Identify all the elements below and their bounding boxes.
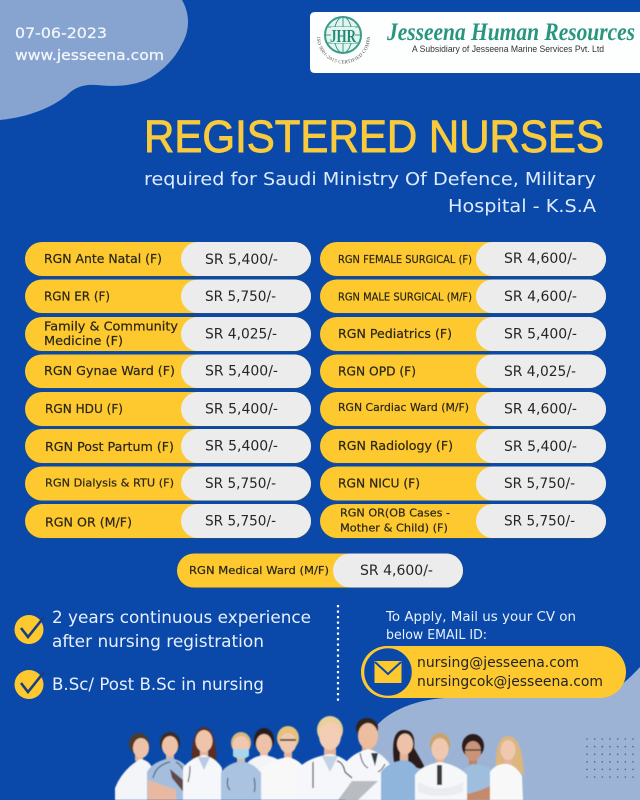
pill: RGN Dialysis and RTU: SR 5,750/- (205, 476, 276, 492)
pill: RGN Medical Ward: SR 4,600/- (360, 563, 433, 579)
subtitle (144, 169, 597, 217)
pill: RGN Dialysis and RTU (25, 466, 311, 502)
pill: RGN Pediatrics: SR 5,400/- (504, 326, 577, 342)
pill: RGN Pediatrics: RGN Pediatrics (F) (338, 327, 452, 341)
pill: RGN Dialysis and RTU: RGN Dialysis & RTU (F) (45, 478, 174, 490)
date and website (15, 26, 164, 64)
pill: RGN Medical Ward (177, 554, 463, 588)
pill: RGN HDU: SR 5,400/- (205, 402, 278, 418)
pill: RGN Cardiac Ward: SR 4,600/- (504, 402, 577, 418)
nurse 4 (221, 732, 261, 800)
nurse 7 (297, 716, 378, 800)
email callout: nursing@jesseena.com (417, 655, 579, 671)
icon: globe logo: JHR (330, 26, 357, 46)
pill: RGN Gynae Ward (25, 354, 311, 389)
pill: RGN OR (25, 504, 311, 539)
pill: RGN OR OB Cases (320, 504, 606, 539)
pill: RGN OR OB Cases: Mother & Child) (F) (340, 523, 448, 535)
pill: RGN Medical Ward: RGN Medical Ward (M/F) (189, 565, 329, 577)
pill: RGN Gynae Ward: SR 5,400/- (205, 364, 278, 380)
subtitle: required for Saudi Ministry Of Defence, Military (144, 169, 596, 190)
pill: Family and Community Medicine: SR 4,025/- (205, 326, 277, 342)
pill: Family and Community Medicine: Family & Community (44, 320, 178, 334)
dot grid (586, 738, 634, 778)
pill: Family and Community Medicine: Medicine (F) (44, 334, 123, 348)
nurse 8 (346, 718, 391, 800)
pill: RGN NICU: RGN NICU (F) (338, 477, 420, 491)
pill: RGN Post Partum: SR 5,400/- (205, 438, 278, 454)
pill: RGN Female Surgical (320, 242, 606, 277)
icon: envelope (364, 648, 412, 696)
nurse 12 (490, 736, 524, 800)
bottom-right blob (345, 667, 640, 800)
requirement: degree: B.Sc/ Post B.Sc in nursing (52, 675, 264, 694)
company logo card (310, 12, 640, 73)
pill: RGN Ante Natal: RGN Ante Natal (F) (44, 252, 162, 266)
pill: RGN ER: RGN ER (F) (44, 290, 110, 304)
pill: RGN OR: RGN OR (M/F) (45, 516, 132, 530)
pill: Family and Community Medicine (25, 317, 311, 352)
email callout: nursingcok@jesseena.com (417, 674, 603, 690)
date and website: www.jesseena.com (15, 48, 164, 64)
pill: RGN Radiology: SR 5,400/- (504, 439, 577, 455)
pill: RGN Male Surgical: RGN MALE SURGICAL (M/F) (338, 292, 472, 304)
nurse 9 (381, 730, 426, 800)
pill: RGN Cardiac Ward: RGN Cardiac Ward (M/F) (338, 402, 469, 414)
icon: globe logo (325, 17, 361, 53)
nurse 2 (147, 732, 200, 800)
pill: RGN ER: SR 5,750/- (205, 289, 276, 305)
apply instructions: below EMAIL ID: (386, 628, 487, 643)
email callout (361, 646, 626, 698)
pill: RGN OPD (320, 354, 606, 389)
nurse 11 (461, 734, 499, 800)
pill: RGN HDU (25, 392, 311, 427)
pill: RGN OPD: RGN OPD (F) (338, 365, 416, 379)
requirement: experience (52, 608, 311, 651)
nurse 3 (183, 727, 222, 800)
pill: RGN NICU: SR 5,750/- (504, 476, 575, 492)
company subtitle: A Subsidiary of Jesseena Marine Services Pvt. Ltd (412, 44, 604, 54)
pill: RGN Ante Natal: SR 5,400/- (205, 252, 278, 268)
pill: RGN Ante Natal (25, 242, 311, 277)
requirement: experience: 2 years continuous experience (52, 608, 311, 627)
pill: RGN Post Partum: RGN Post Partum (F) (45, 440, 174, 454)
pill: RGN Radiology (320, 429, 606, 464)
pill: RGN Cardiac Ward (320, 392, 606, 427)
top-left blob (0, 0, 188, 120)
pill: RGN Pediatrics (320, 317, 606, 352)
nurse 10 (415, 733, 467, 800)
pill: RGN Female Surgical: RGN FEMALE SURGICAL (F) (338, 254, 472, 266)
date and website: 07-06-2023 (15, 26, 107, 42)
pill: RGN Post Partum (25, 429, 311, 464)
nurse 6 (262, 726, 304, 800)
pill: RGN ER (25, 280, 311, 314)
pill: RGN HDU: RGN HDU (F) (45, 402, 123, 416)
pill: RGN Male Surgical: SR 4,600/- (504, 289, 577, 305)
icon: check mark 1 (14, 615, 44, 644)
pill: RGN OR: SR 5,750/- (205, 514, 276, 530)
requirement: experience: after nursing registration (52, 632, 264, 651)
title: REGISTERED NURSES (144, 111, 604, 162)
pill: RGN OPD: SR 4,025/- (504, 364, 576, 380)
pill: RGN Gynae Ward: RGN Gynae Ward (F) (44, 364, 175, 378)
apply instructions: To Apply, Mail us your CV on (385, 610, 576, 625)
icon: check mark 2 (14, 670, 44, 699)
nurse 1 (115, 733, 153, 800)
pill: RGN Female Surgical: SR 4,600/- (504, 251, 577, 267)
nurses group photo illustration (115, 716, 524, 800)
subtitle: Hospital - K.S.A (448, 196, 597, 217)
pill: RGN Radiology: RGN Radiology (F) (338, 439, 453, 453)
pill: RGN Male Surgical (320, 280, 606, 314)
nurse 5 (246, 728, 284, 800)
pill: RGN OR OB Cases: SR 5,750/- (504, 514, 575, 530)
apply instructions (385, 610, 576, 643)
pill: RGN NICU (320, 466, 606, 502)
pill: RGN OR OB Cases: RGN OR(OB Cases - (340, 508, 450, 520)
